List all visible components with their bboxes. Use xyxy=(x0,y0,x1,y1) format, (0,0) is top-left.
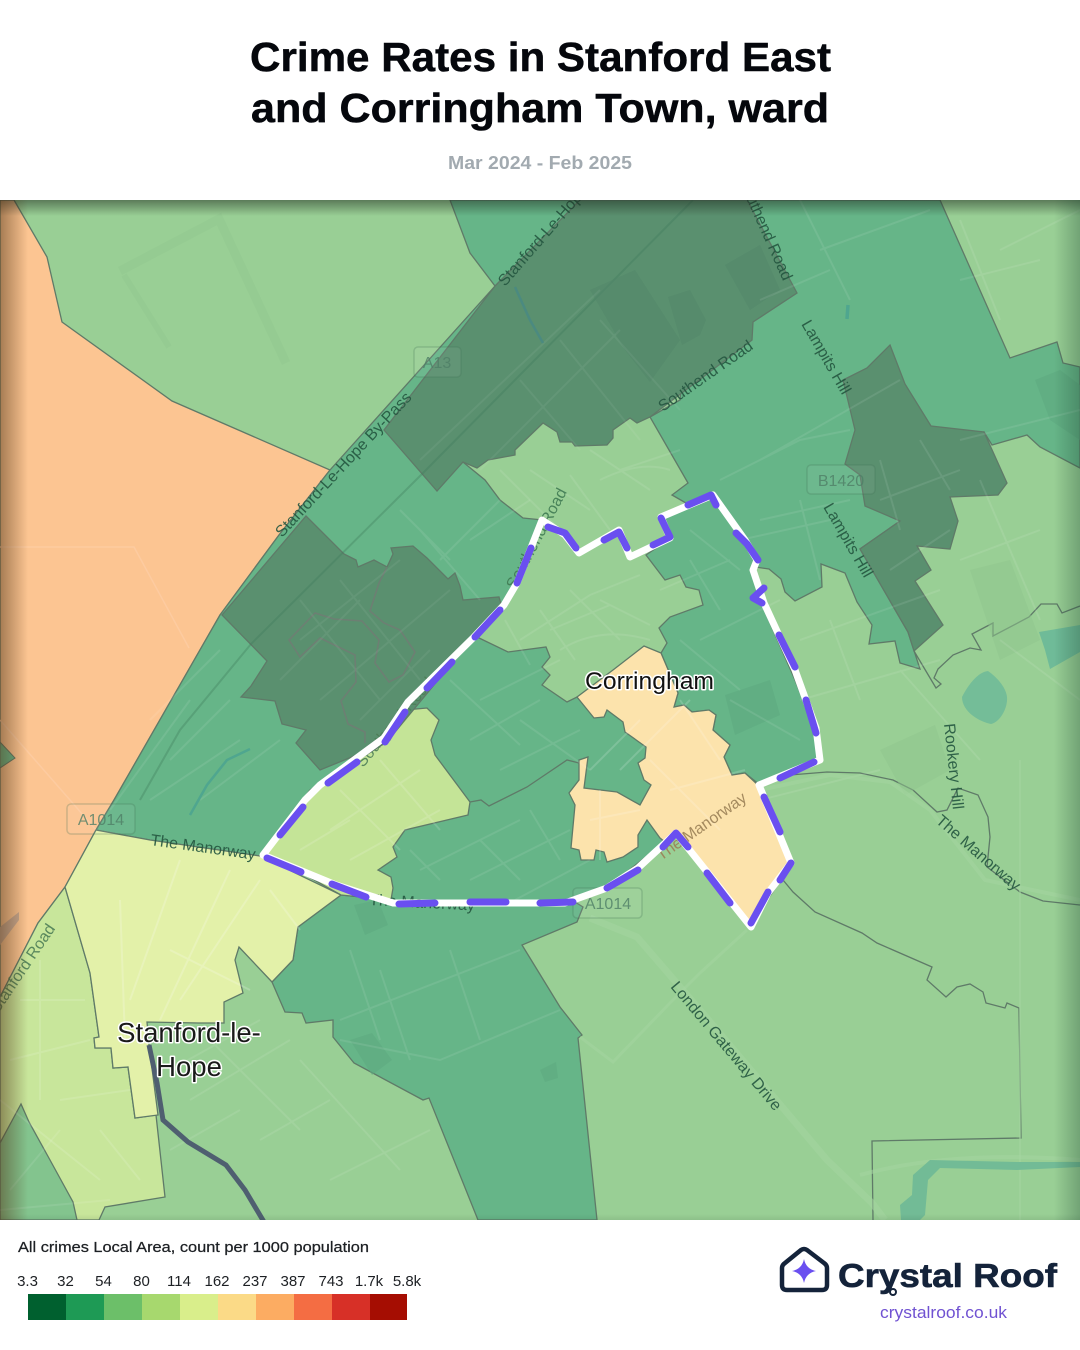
region: faint field tracks xyxy=(120,219,286,363)
legend scale labels: 387 xyxy=(280,1273,306,1290)
road shield labels: A1014 xyxy=(585,896,631,913)
road shield labels: A13 xyxy=(423,355,451,372)
ward boundary: white line xyxy=(263,495,820,927)
region: cream Corringham centre xyxy=(569,646,793,927)
water: stream in north band xyxy=(515,287,543,343)
region: mid-green north-west band xyxy=(95,200,579,856)
place label: Stanford-le-Hope xyxy=(117,1017,261,1082)
region: orange high-crime area xyxy=(0,200,330,997)
legend scale labels: 5.8k xyxy=(393,1273,422,1290)
title xyxy=(250,34,831,131)
road labels: Stanford-Le-Hope By-Pass xyxy=(495,134,633,290)
road labels: London Gateway Drive xyxy=(667,979,785,1114)
place label: Corringham: Corringham xyxy=(585,668,714,695)
road labels: Stanford-Le-Hope By-Pass xyxy=(272,389,415,541)
legend scale labels: 743 xyxy=(318,1273,344,1290)
water: pond xyxy=(962,671,1007,724)
road shield labels: B1420 xyxy=(818,473,864,490)
road labels: Southend Road xyxy=(353,674,438,771)
water: stream west xyxy=(190,749,250,815)
title: and Corringham Town, ward xyxy=(251,85,829,131)
water: canal south-east xyxy=(900,1160,1080,1220)
water: small stream north-east xyxy=(847,305,848,319)
major roads xyxy=(580,780,1021,1210)
road labels xyxy=(0,134,1023,1114)
road labels: Lampits Hill xyxy=(798,318,854,398)
region: dark green north band xyxy=(384,200,797,491)
railway / dark road south-west xyxy=(149,1045,264,1222)
water: lake east xyxy=(1039,625,1080,669)
legend scale labels: 54 xyxy=(95,1273,112,1290)
road labels: The Manorway xyxy=(654,790,750,864)
road shield labels: A1014 xyxy=(78,812,124,829)
legend scale labels: 32 xyxy=(57,1273,74,1290)
darker building and field patches xyxy=(590,245,780,382)
legend scale labels xyxy=(17,1273,422,1290)
road labels: Rookery Hill xyxy=(940,723,966,810)
road labels: Southend Road xyxy=(734,175,795,283)
ward boundary: purple dashes xyxy=(267,495,816,923)
road labels: The Manorway xyxy=(369,892,475,915)
road labels: Southend Road xyxy=(656,338,756,415)
legend scale labels: 3.3 xyxy=(17,1273,38,1290)
road shields xyxy=(67,347,875,918)
subtitle: date range: Mar 2024 - Feb 2025 xyxy=(448,153,632,173)
place label: Stanford-le-Hope: Hope xyxy=(156,1051,222,1082)
title: Crime Rates in Stanford East xyxy=(250,34,831,80)
place label: Stanford-le-Hope: Stanford-le- xyxy=(117,1017,261,1048)
website link: crystalroof.co.uk xyxy=(880,1304,1008,1322)
icon: Crystal Roof house logo xyxy=(782,1249,827,1290)
region: mid-green north-east area xyxy=(646,200,1080,785)
streets network xyxy=(0,200,1080,1210)
road labels: Southend Road xyxy=(504,486,571,592)
region boundaries and detail lines xyxy=(140,200,1080,1220)
road labels: Lampits Hill xyxy=(820,500,876,581)
legend scale labels: 80 xyxy=(133,1273,150,1290)
legend colour bar xyxy=(28,1294,407,1320)
road labels: The Manorway xyxy=(932,812,1023,894)
region: dark green east block xyxy=(843,345,1007,651)
road labels: The Manorway xyxy=(149,832,257,864)
legend scale labels: 237 xyxy=(242,1273,268,1290)
road shield labels xyxy=(78,355,864,913)
legend title: All crimes Local Area, count per 1000 population xyxy=(18,1240,369,1256)
region: pale lime Stanford-le-Hope area xyxy=(65,830,341,1118)
region: lime inside ward xyxy=(260,708,470,900)
region: lime south-west area xyxy=(0,887,165,1220)
legend scale labels: 114 xyxy=(167,1273,191,1290)
region: mid-green central and south area xyxy=(271,638,662,1220)
legend scale labels: 1.7k xyxy=(355,1273,384,1290)
legend scale labels: 162 xyxy=(204,1273,230,1290)
region: dark green west block xyxy=(222,516,501,770)
map edge vignette xyxy=(0,200,1080,1220)
region: green south-west corner xyxy=(0,1104,77,1220)
logo wordmark: Crystal Roof xyxy=(838,1257,1058,1294)
